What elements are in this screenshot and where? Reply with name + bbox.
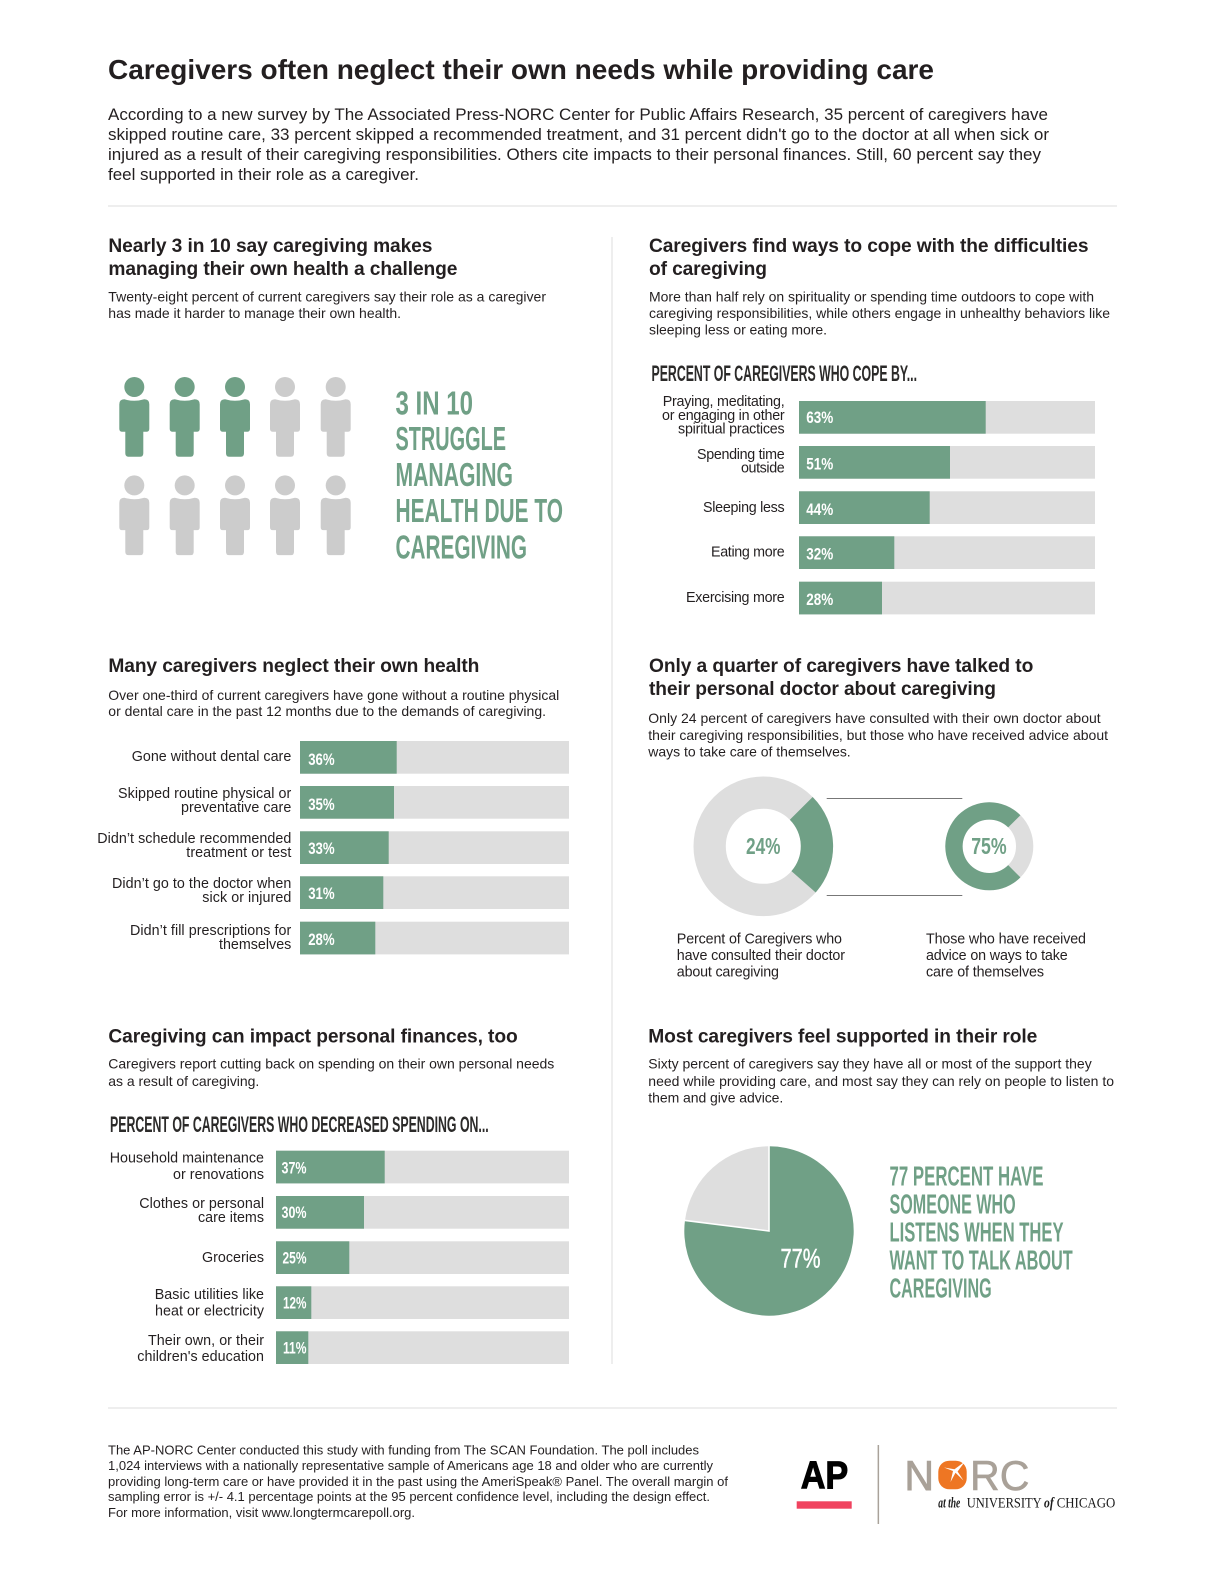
bar: education 11% xyxy=(137,1331,569,1365)
description: need while providing care, and most say they can rely on people to listen to xyxy=(648,1073,1114,1089)
panel: feel supported xyxy=(648,1027,1114,1316)
footer methodology text: providing long-term care or have provided it in the past using the AmeriSpeak® Panel. The overall margin of xyxy=(108,1474,728,1489)
intro text: feel supported in their role as a caregiver. xyxy=(108,165,419,184)
callout: 77 percent: CAREGIVING xyxy=(890,1272,992,1303)
donut: 75 percent: 75% xyxy=(971,833,1007,859)
heading: Caregivers find ways to cope with the difficulties xyxy=(649,236,1088,257)
logo: NORC at the University of Chicago: CHICAGO xyxy=(1057,1495,1115,1511)
description: Caregivers report cutting back on spending on their own personal needs xyxy=(108,1056,554,1072)
logo: AP: AP xyxy=(801,1454,848,1497)
bar: household 37%: 37% xyxy=(282,1159,307,1177)
callout: 77 percent xyxy=(890,1160,1073,1303)
bar: routine 35%: 35% xyxy=(308,796,335,814)
heading: Caregiving can impact personal finances, too xyxy=(108,1027,518,1048)
description xyxy=(108,687,559,719)
footer methodology text xyxy=(108,1442,728,1520)
donut: 75 percent xyxy=(945,802,1025,890)
logo: NORC at the University of Chicago: of xyxy=(1044,1495,1055,1511)
callout: 3 in 10: HEALTH DUE TO xyxy=(396,492,563,529)
bar: dental 36%: 36% xyxy=(308,751,335,769)
caption: received advice xyxy=(926,931,1086,981)
chart title: PERCENT OF CAREGIVERS WHO DECREASED SPENDING ON... xyxy=(110,1112,489,1137)
description xyxy=(649,288,1110,338)
description: Twenty-eight percent of current caregivers say their role as a caregiver xyxy=(108,288,546,304)
bar: doctor 31% xyxy=(112,876,569,909)
bar: sleeping 44% xyxy=(703,491,1095,524)
panel: coping xyxy=(649,236,1110,614)
donut: 24 percent: 24% xyxy=(746,833,780,859)
heading: Only a quarter of caregivers have talked to xyxy=(649,656,1033,677)
bar: outside 51%: 51% xyxy=(806,455,834,473)
bar: exercising 28%: Exercising more xyxy=(686,590,785,606)
bar: outside 51%: Spending time xyxy=(697,447,785,463)
heading: their personal doctor about caregiving xyxy=(649,679,996,700)
description: or dental care in the past 12 months due to the demands of caregiving. xyxy=(108,703,546,719)
callout: 3 in 10: CAREGIVING xyxy=(396,528,527,566)
bar: household 37% xyxy=(110,1150,569,1183)
bar: praying 63%: Praying, meditating, xyxy=(663,394,785,410)
heading: managing their own health a challenge xyxy=(108,259,458,280)
bar: praying 63%: spiritual practices xyxy=(678,421,785,437)
bar: exercising 28%: 28% xyxy=(806,591,834,609)
intro text: According to a new survey by The Associated Press-NORC Center for Public Affairs Research, 35 percent of caregivers have xyxy=(108,105,1048,124)
callout: 3 in 10: STRUGGLE xyxy=(396,420,506,457)
heading: Nearly 3 in 10 say caregiving makes xyxy=(108,236,432,257)
panel: health challenge xyxy=(108,236,563,566)
description: caregiving responsibilities, while others engage in unhealthy behaviors like xyxy=(649,305,1110,321)
callout: 77 percent: 77 PERCENT HAVE xyxy=(890,1160,1044,1192)
bar: eating 32% xyxy=(711,536,1095,569)
description: ways to take care of themselves. xyxy=(647,744,851,760)
bar: prescriptions 28%: Didn’t fill prescriptions for xyxy=(130,923,292,939)
description: Over one-third of current caregivers have gone without a routine physical xyxy=(108,687,559,703)
heading xyxy=(108,236,458,280)
callout: 3 in 10 xyxy=(396,384,563,566)
description: them and give advice. xyxy=(648,1090,783,1106)
bar: routine 35% xyxy=(118,786,569,819)
callout: 77 percent: WANT TO TALK ABOUT xyxy=(890,1244,1073,1275)
description: Only 24 percent of caregivers have consulted with their own doctor about xyxy=(648,710,1101,726)
bar: clothes 30% xyxy=(139,1196,569,1229)
bar: clothes 30%: care items xyxy=(198,1210,264,1226)
pie chart: 77 percent xyxy=(684,1146,854,1316)
bar: doctor 31%: sick or injured xyxy=(202,890,291,906)
callout: 77 percent: LISTENS WHEN THEY xyxy=(890,1217,1064,1248)
bar: treatment 33%: 33% xyxy=(308,840,335,858)
heading xyxy=(649,236,1088,280)
caption: consulted doctor: about caregiving xyxy=(677,965,779,981)
panel: doctor talks xyxy=(647,656,1108,981)
description: Sixty percent of caregivers say they have all or most of the support they xyxy=(648,1056,1092,1072)
heading: Most caregivers feel supported in their role xyxy=(648,1027,1038,1048)
logo: NORC at the University of Chicago: UNIVERSITY xyxy=(967,1495,1042,1511)
bar: prescriptions 28%: themselves xyxy=(219,937,291,953)
bar: utilities 12%: 12% xyxy=(283,1294,307,1312)
bar chart: coping xyxy=(662,394,1095,614)
bar: prescriptions 28% xyxy=(130,922,569,954)
chart title: PERCENT OF CAREGIVERS WHO COPE BY... xyxy=(652,361,917,386)
bar: education 11%: 11% xyxy=(283,1339,307,1357)
bar: household 37%: Household maintenance xyxy=(110,1150,264,1166)
caption: consulted doctor: have consulted their doctor xyxy=(677,948,845,964)
footer methodology text: For more information, visit www.longtermcarepoll.org. xyxy=(108,1505,415,1520)
bar: groceries 25%: Groceries xyxy=(202,1250,264,1266)
bar: treatment 33%: treatment or test xyxy=(186,845,291,861)
description: as a result of caregiving. xyxy=(108,1073,259,1089)
bar: groceries 25%: 25% xyxy=(282,1249,307,1267)
bar: household 37%: or renovations xyxy=(173,1167,264,1183)
title: Caregivers often neglect their own needs while providing care xyxy=(108,54,934,85)
intro text: injured as a result of their caregiving responsibilities. Others cite impacts to their personal finances. Still, 60 percent say they xyxy=(108,145,1042,164)
icon: ten people, three highlighted xyxy=(119,377,351,555)
intro text: skipped routine care, 33 percent skipped a recommended treatment, and 31 percent didn't go to the doctor at all when sick or xyxy=(108,125,1049,144)
callout: 3 in 10: 3 IN 10 xyxy=(396,384,473,422)
bar: outside 51%: outside xyxy=(741,461,785,477)
bar: clothes 30%: Clothes or personal xyxy=(139,1196,264,1212)
description: More than half rely on spirituality or spending time outdoors to cope with xyxy=(649,288,1094,304)
bar: education 11%: children's education xyxy=(137,1349,264,1365)
logo: NORC at the University of Chicago xyxy=(904,1452,1115,1511)
footer methodology text: 1,024 interviews with a nationally representative sample of Americans age 18 and older who are currently xyxy=(108,1458,714,1473)
bar: treatment 33%: Didn’t schedule recommended xyxy=(97,831,291,847)
bar: sleeping 44%: Sleeping less xyxy=(703,500,785,516)
bar: praying 63%: or engaging in other xyxy=(662,408,785,424)
caption: consulted doctor xyxy=(677,931,845,981)
bar: groceries 25% xyxy=(202,1241,569,1274)
caption: received advice: care of themselves xyxy=(926,965,1044,981)
bar: clothes 30%: 30% xyxy=(282,1204,307,1222)
bar: doctor 31%: 31% xyxy=(308,885,335,903)
bar: praying 63% xyxy=(662,394,1095,437)
logo: NORC at the University of Chicago: RC xyxy=(970,1452,1030,1499)
footer methodology text: sampling error is +/- 4.1 percentage points at the 95 percent confidence level, including the design effect. xyxy=(108,1489,710,1504)
panel: finances xyxy=(108,1027,569,1365)
description xyxy=(648,1056,1114,1106)
description xyxy=(647,710,1108,760)
bar: routine 35%: Skipped routine physical or xyxy=(118,786,292,802)
bar: utilities 12%: Basic utilities like xyxy=(155,1287,264,1303)
footer methodology text: The AP-NORC Center conducted this study with funding from The SCAN Foundation. The poll includes xyxy=(108,1442,700,1458)
bar: prescriptions 28%: 28% xyxy=(308,931,335,949)
callout: 77 percent: SOMEONE WHO xyxy=(890,1188,1016,1219)
bar: doctor 31%: Didn’t go to the doctor when xyxy=(112,876,291,892)
bar: education 11%: Their own, or their xyxy=(148,1333,264,1349)
description: sleeping less or eating more. xyxy=(649,322,827,338)
callout: 3 in 10: MANAGING xyxy=(396,456,513,493)
caption: received advice: Those who have received xyxy=(926,931,1086,947)
caption: received advice: advice on ways to take xyxy=(926,948,1068,964)
bar: utilities 12%: heat or electricity xyxy=(155,1304,265,1320)
bar: exercising 28% xyxy=(686,582,1095,614)
bar chart: neglect xyxy=(97,741,569,954)
bar: utilities 12% xyxy=(155,1286,569,1320)
heading: of caregiving xyxy=(649,259,767,280)
bar: praying 63%: 63% xyxy=(806,409,834,427)
description: their caregiving responsibilities, but those who have received advice about xyxy=(648,727,1108,743)
logo: NORC at the University of Chicago: N xyxy=(904,1452,934,1499)
bar: routine 35%: preventative care xyxy=(181,800,291,816)
caption: consulted doctor: Percent of Caregivers who xyxy=(677,931,842,947)
description xyxy=(108,1056,554,1089)
intro text xyxy=(108,105,1049,184)
bar chart: spending xyxy=(110,1150,569,1365)
bar: dental 36%: Gone without dental care xyxy=(132,749,291,765)
description xyxy=(108,288,546,321)
heading xyxy=(649,656,1033,700)
bar: outside 51% xyxy=(697,446,1095,479)
bar: eating 32%: 32% xyxy=(806,545,834,563)
heading: Many caregivers neglect their own health xyxy=(108,656,479,677)
panel: neglect health xyxy=(97,656,569,954)
bar: treatment 33% xyxy=(97,831,569,864)
bar: dental 36% xyxy=(132,741,569,774)
logo: NORC at the University of Chicago: at the xyxy=(938,1495,961,1511)
description: has made it harder to manage their own health. xyxy=(108,305,401,321)
bar: eating 32%: Eating more xyxy=(711,544,785,560)
bar: sleeping 44%: 44% xyxy=(806,501,834,519)
donut: 24 percent xyxy=(710,793,833,900)
pie chart: 77 percent: 77% xyxy=(780,1244,820,1274)
